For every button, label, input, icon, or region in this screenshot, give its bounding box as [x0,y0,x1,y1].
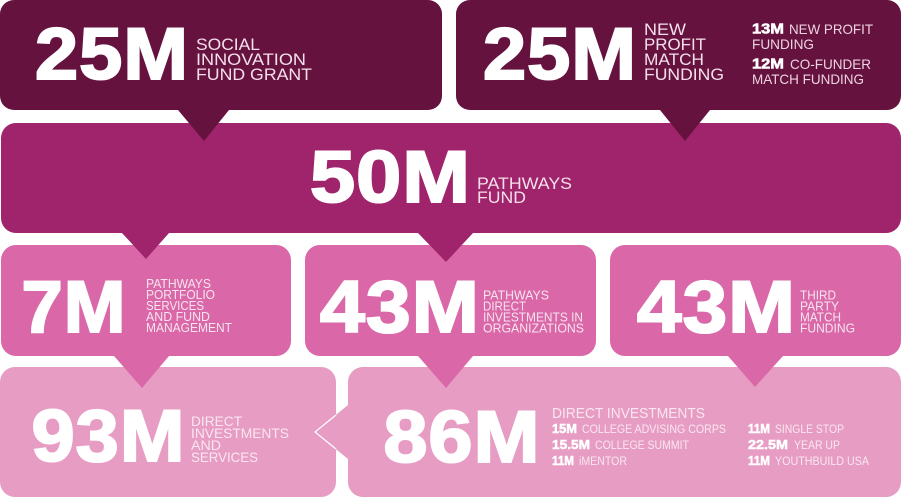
text: third party match funding: FUNDING [800,322,855,336]
heading: 25M: 25M [483,14,637,95]
text: pathways portfolio services and fund management: PATHWAYS [146,277,211,291]
text: social innovation fund grant [196,36,312,84]
text: third party match funding: THIRD [800,288,836,302]
list: investments column one: 15M [552,421,577,436]
text: direct investments and services [191,413,289,465]
text: pathways fund: FUND [477,189,526,207]
list: investments column one: COLLEGE ADVISING CORPS [582,424,726,436]
text: funding breakdown [752,20,873,87]
text: social innovation fund grant: SOCIAL [196,36,260,54]
text: direct investments and services: DIRECT [191,413,242,429]
text: new profit match funding: PROFIT [644,36,706,54]
text: new profit match funding: MATCH [644,51,704,69]
text: pathways portfolio services and fund management: SERVICES [146,299,204,313]
text: pathways fund: PATHWAYS [477,175,572,193]
list: investments column two: YOUTHBUILD USA [775,456,869,468]
text: funding breakdown: NEW PROFIT [789,21,873,37]
text: funding breakdown: MATCH FUNDING [752,71,864,87]
text: new profit match funding [644,21,724,84]
panel: new profit match funding 25M [456,0,901,141]
text: funding breakdown: 12M [752,56,784,72]
list: investments column two: 11M [748,421,770,436]
arrow: 86M into 93M [315,415,336,449]
text: pathways fund [477,175,572,207]
panel: direct investments and services 93M [0,367,336,497]
heading: 43M: 43M [320,267,480,348]
heading: 86M: 86M [384,397,540,478]
heading: 50M: 50M [310,137,471,218]
text: pathways portfolio services and fund management: AND FUND [146,310,210,324]
panel: third party match funding 43M [610,245,901,387]
text: social innovation fund grant: INNOVATION [196,51,306,69]
text: new profit match funding: FUNDING [644,66,724,84]
list: investments column one: COLLEGE SUMMIT [595,440,689,452]
text: pathways direct investments in organizations: INVESTMENTS IN [483,310,583,324]
text: direct investments and services: SERVICES [191,449,258,465]
panel: direct investments 86M [315,367,901,497]
text: pathways portfolio services and fund management: MANAGEMENT [146,321,232,335]
list: investments column one: iMENTOR [579,456,627,468]
text: pathways portfolio services and fund management [146,277,232,335]
heading: 25M: 25M [35,14,189,95]
text: new profit match funding: NEW [644,21,686,39]
heading: 93M: 93M [32,396,186,477]
list: investments column two: 22.5M [748,437,788,452]
text: third party match funding: MATCH [800,310,841,324]
list: investments column one: 15.5M [552,437,590,452]
text: third party match funding: PARTY [800,300,840,314]
list: investments column one: 11M [552,453,574,468]
text: pathways portfolio services and fund management: PORTFOLIO [146,288,215,302]
list: investments column two: YEAR UP [794,440,840,452]
text: pathways direct investments in organizations [483,288,584,336]
list: investments column two [748,421,869,468]
text: funding breakdown: 13M [752,20,784,38]
text: pathways direct investments in organizations: DIRECT [483,300,526,314]
panel: pathways direct investments 43M [305,245,596,388]
text: funding breakdown: CO-FUNDER [790,56,871,72]
text: direct investments heading: DIRECT INVESTMENTS [552,405,705,422]
panel: social innovation fund grant 25M [0,0,442,141]
heading: 43M: 43M [637,267,796,348]
list: investments column two: SINGLE STOP [775,424,844,436]
panel: pathways portfolio services 7M [1,245,291,388]
list: investments column one [552,421,726,468]
text: pathways direct investments in organizations: PATHWAYS [483,288,549,302]
text: funding breakdown: FUNDING [752,36,814,52]
list: investments column two: 11M [748,453,770,468]
text: social innovation fund grant: FUND GRANT [196,66,312,84]
text: direct investments and services: AND [191,437,221,453]
text: third party match funding [800,288,855,336]
text: pathways direct investments in organizations: ORGANIZATIONS [483,322,584,336]
panel: pathways fund 50M [1,123,901,262]
heading: 7M: 7M [22,267,127,348]
text: direct investments and services: INVESTMENTS [191,425,289,441]
